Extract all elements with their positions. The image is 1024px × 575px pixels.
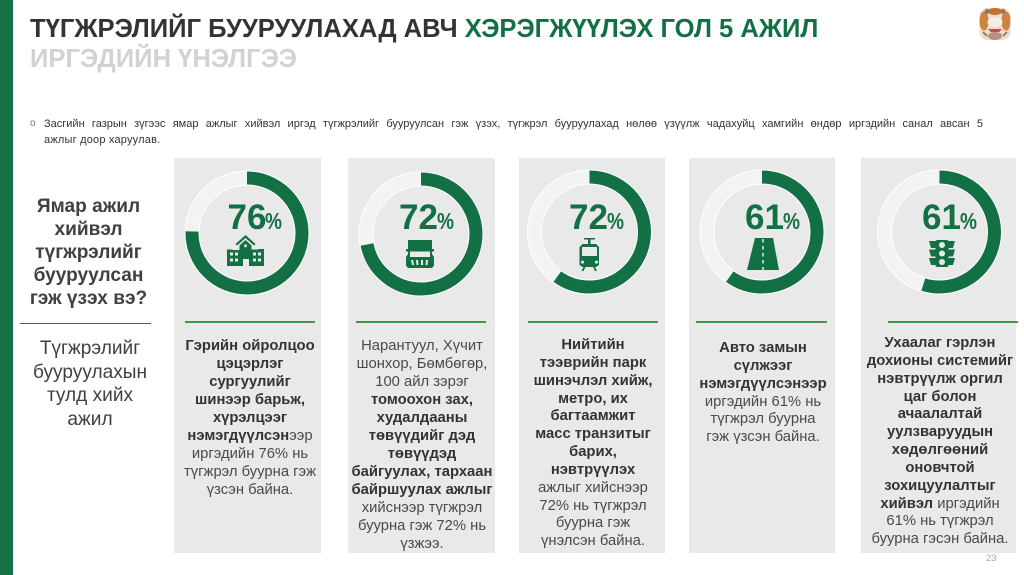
text: public transport: ажлыг хийснээр <box>538 480 648 496</box>
text: traffic lights: нэвтрүүлж оргил <box>877 371 1003 387</box>
text: roads <box>699 340 827 445</box>
ring chart and traffic light icon: 61 <box>922 198 961 237</box>
text: market: төвүүдийг дэд <box>369 428 475 444</box>
text: school: сургуулийг <box>209 374 291 390</box>
text: roads: иргэдийн 61% нь <box>705 394 821 410</box>
text: market: байгуулах, тархаан <box>352 464 492 480</box>
text: traffic lights <box>866 335 1013 547</box>
intro bullet text <box>30 118 983 146</box>
ring chart and truck icon <box>358 172 484 296</box>
ring chart and traffic light icon <box>877 170 1002 294</box>
ring chart and traffic light icon: % <box>960 208 977 234</box>
text: market: төвүүдэд <box>388 446 456 462</box>
ring chart and tram icon: 72 <box>569 198 608 237</box>
text: school: хүрэлцээг <box>213 410 287 426</box>
text: roads: сүлжээг <box>734 358 792 374</box>
ring chart and road icon <box>700 170 824 294</box>
left question heading: Ямар ажил <box>37 196 140 216</box>
text: roads: нэмэгдүүлсэнээр <box>699 376 827 392</box>
text: roads: түгжрэл буурна <box>710 411 816 427</box>
text: market: байршуулах ажлыг <box>352 482 492 498</box>
text: traffic lights: зохицуулалтыг <box>884 478 996 494</box>
left subheading: Түгжрэлийг <box>40 338 140 359</box>
ring chart and school icon: % <box>265 208 282 234</box>
text: traffic lights: уулзваруудын <box>887 424 993 440</box>
text: school: түгжрэл буурна гэж <box>184 464 316 480</box>
text: public transport: тээврийн парк <box>540 355 646 371</box>
left question heading: бууруулсан <box>34 265 143 286</box>
left subheading <box>33 338 147 430</box>
left question heading: хийвэл <box>54 219 123 240</box>
icon: state emblem <box>980 8 1010 40</box>
text: traffic lights: 61% нь түгжрэл <box>886 513 994 529</box>
text: market: Нарантуул, Хүчит <box>361 338 483 354</box>
title <box>30 14 818 73</box>
text: traffic lights: Ухаалаг гэрлэн <box>885 335 995 351</box>
text: traffic lights: хийвэл иргэдийн <box>880 496 1000 512</box>
ring chart and road icon: 61 <box>745 198 784 237</box>
left subheading: тулд хийх <box>47 385 133 406</box>
text: market <box>352 338 492 552</box>
text: traffic lights: цаг болон <box>904 389 976 405</box>
text: public transport: масс транзитыг <box>535 426 651 442</box>
text: market: шонхор, Бөмбөгөр, <box>357 356 487 372</box>
intro bullet text: ажлыг доор харуулав. <box>44 134 160 146</box>
left question heading: түгжрэлийг <box>35 242 142 263</box>
text: public transport: 72% нь түгжрэл <box>539 498 647 514</box>
text: public transport: буурна гэж <box>556 515 630 531</box>
page number: 23 <box>986 553 997 564</box>
ring chart and school icon: 76 <box>228 198 266 237</box>
text: school: үзсэн байна. <box>207 482 293 498</box>
text: public transport: метро, их <box>558 391 628 407</box>
title: ТҮГЖРЭЛИЙГ БУУРУУЛАХАД АВЧ ХЭРЭГЖҮҮЛЭХ ГОЛ 5 АЖИЛ <box>30 15 818 43</box>
text: school: нэмэгдүүлсэнээр <box>187 428 313 444</box>
ring chart and school icon <box>184 170 310 296</box>
text: traffic lights: буурна гэсэн байна. <box>871 531 1008 547</box>
text: traffic lights: хөдөлгөөний <box>892 442 988 458</box>
left subheading: бууруулахын <box>33 362 147 383</box>
ring chart and truck icon: % <box>437 208 454 234</box>
left green sidebar bar <box>0 0 13 575</box>
panel: school 76% <box>174 158 321 553</box>
text: market: үзжээ. <box>400 536 444 552</box>
text: school <box>184 338 316 498</box>
text: market: буурна гэж 72% нь <box>358 518 486 534</box>
text: market: томоохон зах, <box>371 392 473 408</box>
text: market: худалдааны <box>377 410 467 426</box>
text: traffic lights: дохионы системийг <box>867 353 1013 369</box>
panel: roads 61% <box>689 158 835 553</box>
text: school: цэцэрлэг <box>217 356 283 372</box>
ring chart and road icon: % <box>783 208 800 234</box>
text: market: 100 айл зэрэг <box>375 374 469 390</box>
text: traffic lights: ачаалалтай <box>898 406 982 422</box>
left subheading: ажил <box>67 409 113 430</box>
text: school: иргэдийн 76% нь <box>192 446 308 462</box>
text: traffic lights: оновчтой <box>905 460 975 476</box>
text: public transport: барих, <box>569 444 617 460</box>
text: roads: гэж үзсэн байна. <box>706 429 820 445</box>
panel: traffic lights 61% <box>861 158 1016 553</box>
intro bullet text: Засгийн газрын зүгээс ямар ажлыг хийвэл иргэд түгжрэлийг бууруулсан гэж үзэх, түгжрэл бууруулахад нөлөө үзүүлж чадахуйц хамгийн өндөр иргэдийн санал авсан 5 <box>44 118 983 130</box>
title: ИРГЭДИЙН ҮНЭЛГЭЭ <box>30 45 297 73</box>
text: school: шинээр барьж, <box>195 392 305 408</box>
text: public transport: үнэлсэн байна. <box>541 533 645 549</box>
panel: public transport 72% <box>519 158 665 553</box>
panel: market 72% <box>348 158 495 553</box>
text: public transport <box>534 337 652 549</box>
text: roads: Авто замын <box>719 340 807 356</box>
left question heading <box>30 196 147 309</box>
text: public transport: шинэчлэл хийж, <box>534 373 652 389</box>
text: market: хийснээр түгжрэл <box>362 500 482 516</box>
ring chart and tram icon: % <box>607 208 624 234</box>
left question heading: гэж үзэх вэ? <box>30 288 147 309</box>
text: public transport: Нийтийн <box>561 337 625 353</box>
text: public transport: багтаамжит <box>550 408 636 424</box>
text: public transport: нэвтрүүлэх <box>551 462 635 478</box>
ring chart and tram icon <box>527 170 652 294</box>
ring chart and truck icon: 72 <box>399 198 438 237</box>
intro bullet text: o <box>30 118 36 129</box>
text: school: Гэрийн ойролцоо <box>185 338 315 354</box>
